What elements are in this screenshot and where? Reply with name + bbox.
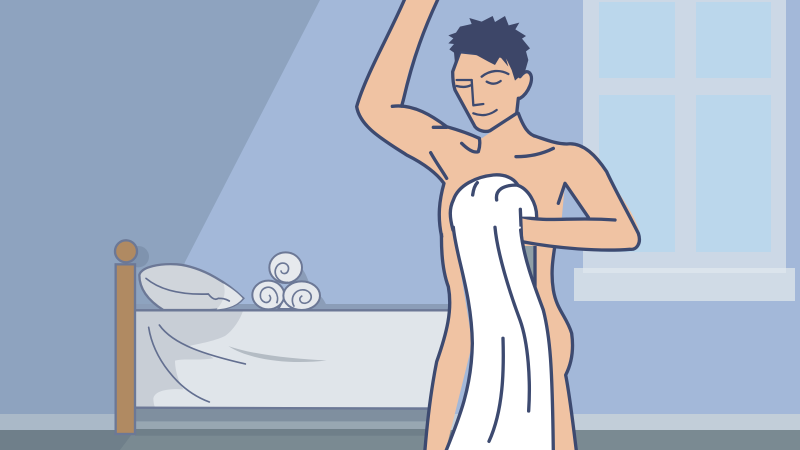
head [448, 16, 531, 131]
sheet folds [149, 325, 245, 402]
towel drape [445, 227, 553, 450]
left leg strip [425, 227, 472, 450]
leg outlines [425, 227, 577, 450]
post [116, 264, 135, 434]
arm pit gap [562, 183, 588, 219]
post knob [115, 240, 137, 262]
wall shadow [0, 0, 320, 450]
facial features [457, 71, 508, 115]
man [357, 0, 640, 450]
sheet shadow [135, 310, 243, 407]
sheet crease [228, 346, 327, 362]
torso fill [357, 0, 640, 248]
pillow [139, 264, 243, 310]
bed edges [135, 310, 448, 409]
bed [115, 240, 448, 436]
under bed bands [135, 407, 435, 422]
bed back shadow [135, 304, 448, 311]
face [453, 52, 531, 131]
window [574, 0, 795, 301]
floor and baseboard [0, 414, 800, 450]
right leg strip [535, 243, 577, 450]
body outline [357, 0, 639, 250]
mattress sheet [135, 310, 448, 407]
gray gap behind towel [520, 243, 535, 290]
towel shadow [287, 263, 328, 310]
rolled towels [252, 252, 320, 310]
hair [448, 16, 530, 81]
upper body [357, 0, 640, 251]
body lower [425, 227, 577, 450]
towel top [450, 175, 537, 242]
forearm [522, 217, 640, 251]
post shadow [128, 246, 149, 267]
